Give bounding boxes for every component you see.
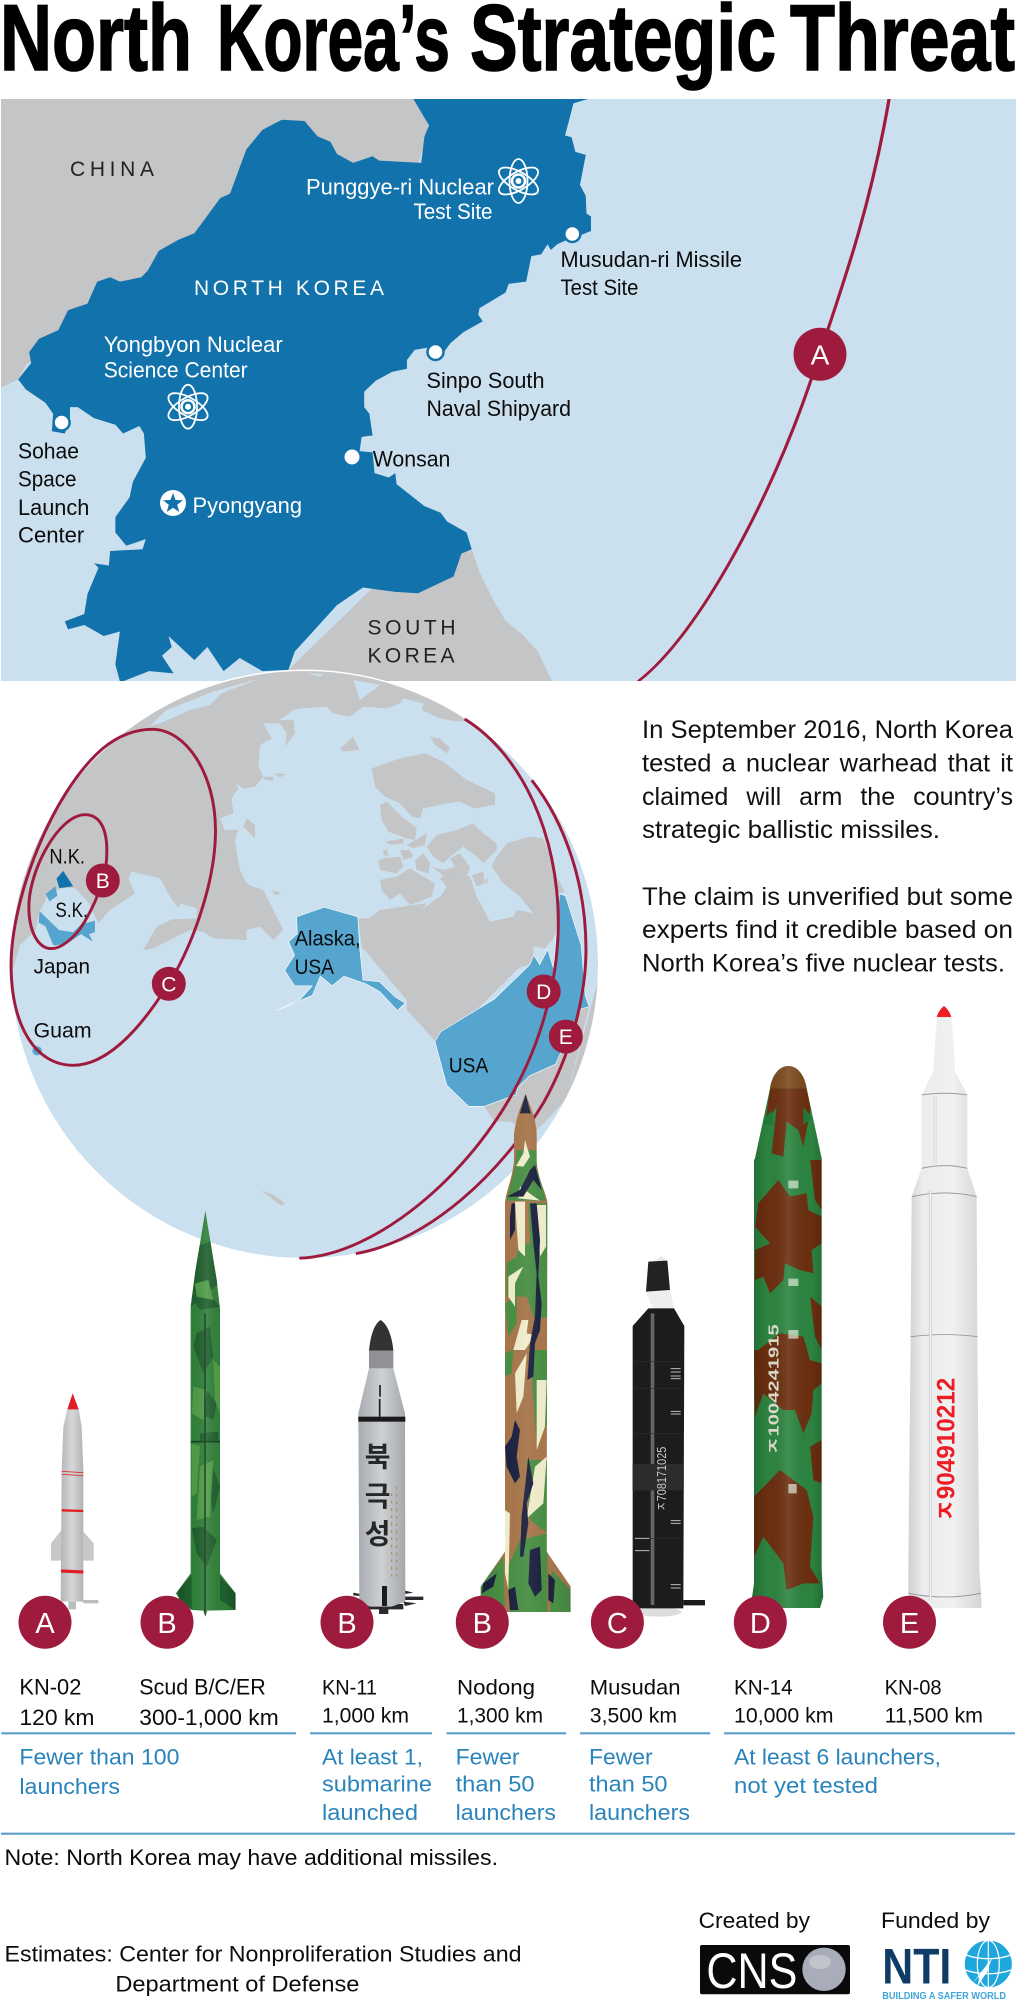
badge: B Scud: B [157,1608,177,1640]
land: South Korea [46,886,57,902]
missile: Nodong [480,1094,571,1612]
text block: explanation: tested a nuclear warhead that it [642,750,1013,778]
missile names and ranges: 11,500 km [885,1705,983,1728]
missile names and ranges: 300-1,000 km [139,1705,279,1730]
badge: E on globe [549,1020,583,1054]
missile names and ranges: 120 km [19,1705,94,1730]
missile names and ranges [19,1674,983,1730]
missile names and ranges: Musudan [590,1676,680,1699]
launcher counts: launchers [456,1800,556,1825]
badge: D KN-14 [734,1596,787,1649]
label: South Korea: SOUTH [368,617,456,640]
launcher counts: launched [322,1800,418,1825]
label: Punggye-ri [306,174,494,224]
globe labels: S.K. [55,899,88,922]
badge: B KN-11: B [337,1608,357,1640]
marker: Wonsan [344,449,360,465]
label: China: CHINA [70,158,154,181]
badge: B on globe: B [96,870,110,893]
missile: Scud [176,1210,236,1616]
missile: KN-11: 북 [365,1442,391,1473]
globe labels [34,845,488,1078]
missile names and ranges: KN-14 [734,1676,793,1699]
badge: A KN-02: A [35,1608,55,1640]
label: Sohae [18,439,89,548]
missile names and ranges: KN-08 [885,1676,942,1699]
missile: KN-14: ㅈ1004241915 [767,1324,783,1455]
label: Musudan-ri: Musudan-ri Missile [560,247,742,272]
label: Sinpo: Naval Shipyard [426,396,571,421]
logo: CNS: CNS [706,1943,797,1999]
land: China [0,99,428,388]
launcher counts: launchers [589,1800,690,1825]
globe labels: Guam [34,1019,92,1042]
label: Yongbyon [104,332,283,383]
launcher counts: Fewer than 100 [19,1744,179,1769]
text block: explanation: strategic ballistic missiles. [642,816,940,844]
credit: funded by: Funded by [881,1908,990,1933]
label: Sohae: Sohae [18,439,79,464]
text block: explanation [642,716,1013,978]
launcher counts: At least 1, [322,1744,423,1769]
icon: capital star [160,490,186,516]
badge: C Musudan: C [607,1608,628,1640]
missile: KN-08: ㅈ904910212 [934,1378,961,1522]
title [0,0,1015,90]
land: Asia [12,671,465,970]
globe labels: USA [449,1055,488,1078]
sources: Department of Defense [115,1972,359,1997]
badge: A on map [794,328,846,381]
badge: D on globe: D [536,981,551,1004]
label: Yongbyon: Science Center [104,358,248,383]
missile names and ranges: KN-02 [19,1674,81,1699]
missile names and ranges: 3,500 km [590,1705,677,1728]
panel: globe [10,670,598,1260]
label: Sohae: Space [18,466,76,491]
panel: Korean peninsula map [0,99,1016,681]
launcher counts: Fewer [456,1744,520,1769]
logo: NTI: NTI [882,1938,951,1994]
launcher counts: submarine [322,1772,432,1797]
icon: atom Yongbyon [164,385,212,429]
missile names and ranges: Scud B/C/ER [139,1674,266,1699]
label: Sinpo [426,368,571,421]
sources: Estimates: Center for Nonproliferation Studies and [4,1942,522,1967]
launcher counts: Fewer [589,1744,653,1769]
land: South Korea [285,549,552,681]
logo: NTI [882,1938,1012,2000]
marker: Sinpo [428,344,444,360]
text block: explanation: The claim is unverified but some [642,883,1013,911]
credit: created by: Created by [699,1908,810,1933]
label: Sinpo: Sinpo South [426,368,544,393]
text block: explanation: In September 2016, North Korea [642,716,1013,744]
badge: C on globe: C [161,973,176,996]
globe labels: Alaska, [295,928,361,950]
land: contiguous USA [435,894,589,1106]
label: Wonsan: Wonsan [373,446,450,472]
badge: D KN-14: D [750,1608,771,1640]
land: North Korea [18,99,591,681]
missile: KN-08 [908,1006,982,1608]
missile: KN-11: 성 [365,1518,391,1549]
marker: Musudan-ri [564,226,580,242]
text block: explanation: claimed will arm the country’s [642,783,1013,811]
missile: KN-14 [752,1066,824,1608]
missile names and ranges: 10,000 km [734,1705,834,1728]
globe labels: USA [295,956,334,979]
marker: Sohae [54,414,70,430]
note: Note: North Korea may have additional missiles. [4,1845,498,1870]
badge: C Musudan [591,1596,644,1649]
label: South Korea: KOREA [368,644,454,667]
globe labels: Japan [34,956,90,978]
label: Punggye-ri: Test Site [414,199,492,224]
missile names and ranges: 1,300 km [457,1705,543,1728]
launcher counts: not yet tested [734,1773,878,1798]
land: Japan [39,911,95,946]
land: Guam [32,1046,42,1055]
missile: KN-02 [51,1393,98,1609]
badge: C on globe [152,967,186,1001]
text block: explanation: North Korea’s five nuclear tests. [642,950,1005,978]
launcher counts: At least 6 launchers, [734,1744,941,1769]
missile: Musudan: ㅈ708171025 [655,1447,669,1511]
missile names and ranges: 1,000 km [322,1705,409,1728]
launcher counts [19,1744,941,1825]
badge: B on globe [86,864,120,898]
land: North Korea [57,871,73,888]
label: Sohae: Center [18,523,84,548]
globe labels: N.K. [49,845,85,868]
label: North Korea: NORTH KOREA [194,277,384,300]
label: Sohae: Launch [18,495,89,520]
land: USA and allies [32,871,605,1206]
badge: B Scud [140,1596,194,1649]
badge: E on globe: E [559,1026,573,1049]
label: Punggye-ri: Punggye-ri Nuclear [306,174,494,200]
label: Yongbyon: Yongbyon Nuclear [104,332,283,357]
land: Alaska [277,907,405,1011]
badge: A KN-02 [18,1596,72,1649]
label: South Korea [368,617,456,667]
badge: A on map: A [811,340,830,370]
missile: KN-11: 극 [365,1481,391,1512]
badge: B Nodong [456,1596,509,1649]
badge: B KN-11 [320,1596,374,1649]
sources [4,1942,522,1997]
badge: D on globe [527,974,561,1008]
label: Musudan-ri: Test Site [560,275,638,300]
text block: explanation: experts find it credible based on [642,916,1013,944]
badge: E KN-08 [883,1596,936,1649]
missile: Musudan [633,1256,705,1617]
missile names and ranges: Nodong [457,1676,535,1699]
badge: E KN-08: E [900,1608,919,1640]
label: Pyongyang: Pyongyang [192,493,302,518]
label: Musudan-ri [560,247,742,300]
missile names and ranges: KN-11 [322,1676,377,1699]
land: Arctic and Canada [340,737,565,1041]
badge: B Nodong: B [473,1608,492,1640]
launcher counts: than 50 [589,1772,668,1797]
range arc A [638,99,889,681]
missile: KN-11 [353,1320,423,1614]
icon: atom Punggye-ri [495,159,542,203]
launcher counts: than 50 [456,1772,535,1797]
launcher counts: launchers [19,1774,120,1799]
range rings B C D E [11,719,586,1258]
